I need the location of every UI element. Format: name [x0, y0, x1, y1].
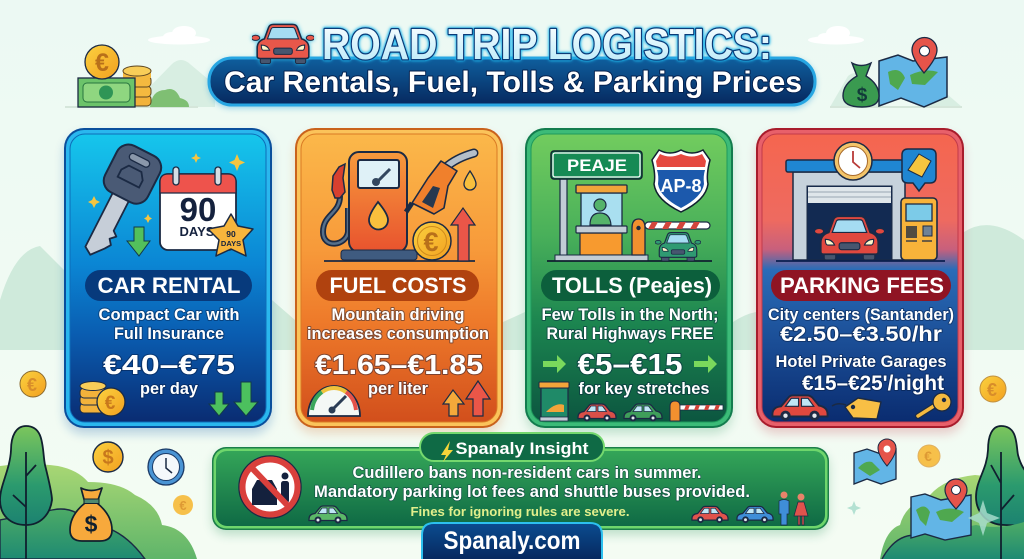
- description: increases consumption: [307, 325, 489, 343]
- icon: mini barrier: [670, 401, 723, 421]
- icon: price tag: [832, 398, 881, 419]
- icon: coin stack: €: [105, 393, 116, 414]
- icon: mini toll: [539, 382, 569, 421]
- icon: calendar: DAYS: [180, 224, 215, 239]
- sparkles: [88, 153, 245, 223]
- icon: star badge: [208, 214, 253, 256]
- title banner: [209, 58, 815, 105]
- insight text: [314, 463, 750, 519]
- icon: euro coin right: €: [987, 380, 997, 400]
- footer: website: Spanaly.com: [444, 527, 580, 555]
- description: [542, 306, 718, 343]
- icon: star badge: DAYS: [221, 239, 241, 248]
- decoration: money bag and map, top right: $: [857, 85, 868, 106]
- icon: money bag left: [70, 488, 112, 541]
- insight text: Fines for ignoring rules are severe.: [410, 504, 630, 519]
- icon: calendar: 90: [180, 191, 216, 228]
- sign: peaje: PEAJE: [567, 156, 627, 175]
- icon: fuel drop: [464, 171, 476, 190]
- description: Few Tolls in the North;: [542, 306, 718, 324]
- hotel garage rate: Hotel Private Garages: [776, 353, 946, 371]
- icon: down arrows: [209, 382, 258, 416]
- icon: large map: [911, 479, 971, 540]
- price: [315, 349, 483, 398]
- description: Compact Car with: [98, 306, 240, 324]
- heading pill: PARKING FEES: [780, 273, 944, 298]
- icon: AP-8 shield: [652, 150, 710, 212]
- icon: no cars sign: [239, 456, 301, 518]
- city center rate: City centers (Santander): [768, 306, 954, 324]
- icon: garage clock: [834, 142, 872, 180]
- icon: red side car: [772, 395, 828, 421]
- icon: fuel pump: [324, 152, 475, 261]
- icon: euro coin left: €: [27, 375, 37, 395]
- icon: star badge: 90: [226, 229, 236, 239]
- insight tab: [420, 433, 604, 462]
- icon: pay kiosk: [901, 198, 937, 260]
- panel: fuel costs: [295, 128, 503, 434]
- decoration: money bag and map, top right: [830, 38, 962, 107]
- icon: green car: [309, 506, 347, 524]
- icon: green arrows: [543, 355, 717, 373]
- icon: ticket bubble: [902, 149, 936, 191]
- icon: calendar: [160, 167, 236, 250]
- panel: parking fees: [756, 128, 964, 434]
- heading pill: CAR RENTAL: [98, 273, 240, 298]
- subtitle: Car Rentals, Fuel, Tolls & Parking Prices: [224, 66, 802, 99]
- scenery: bottom-right hills and tree: [880, 426, 1024, 559]
- icon: green down arrow: [127, 227, 150, 256]
- icon: euro coin: [413, 222, 451, 260]
- price: per day: [140, 379, 199, 398]
- heading pill: TOLLS (Peajes): [552, 273, 712, 298]
- icon: gauge: [308, 386, 360, 416]
- price: €1.65–€1.85: [315, 349, 483, 380]
- price: €40–€75: [103, 349, 235, 380]
- description: [307, 306, 489, 343]
- panel: tolls: [525, 128, 733, 434]
- insight text: Mandatory parking lot fees and shuttle buses provided.: [314, 482, 750, 501]
- icon: blue car: [737, 506, 773, 523]
- panel: spanaly insight: [212, 433, 829, 535]
- heading pill: [85, 270, 252, 301]
- icon: dollar coin: [93, 442, 123, 472]
- hotel garage rate: €15–€25'/night: [802, 372, 944, 395]
- icon: title car: [251, 24, 315, 64]
- sign: peaje: [551, 151, 642, 179]
- icon: red car: [578, 404, 616, 422]
- icon: faded coin right: €: [924, 448, 932, 464]
- icon: toll booth: [547, 151, 712, 261]
- description: Rural Highways FREE: [546, 325, 714, 343]
- icon: left nozzle and hose: [323, 164, 348, 244]
- panel: car rental: [64, 128, 272, 434]
- heading pill: FUEL COSTS: [330, 273, 466, 298]
- title: ROAD TRIP LOGISTICS:: [322, 20, 772, 69]
- heading pill: [316, 270, 479, 301]
- icon: green car: [655, 232, 701, 261]
- icon: red car: [814, 216, 885, 260]
- icon: money bag left: $: [85, 511, 98, 537]
- icon: faded coin right: [918, 445, 940, 467]
- icon: red up arrow: [451, 208, 475, 261]
- icon: clock: [148, 449, 184, 485]
- icon: AP-8 shield: AP-8: [660, 175, 702, 196]
- icon: right nozzle: [406, 153, 474, 214]
- icon: dollar coin: $: [102, 447, 114, 469]
- icon: garage: [776, 160, 945, 261]
- decoration: money and coins, top left: [65, 45, 198, 107]
- icon: up arrows: [443, 390, 464, 416]
- icon: euro coin left: [20, 371, 46, 397]
- price: per liter: [368, 379, 428, 398]
- icon: barrier: [632, 219, 710, 255]
- price: [103, 349, 235, 398]
- insight text: Cudillero bans non-resident cars in summer.: [352, 463, 702, 482]
- icon: euro coin: €: [423, 227, 439, 257]
- icon: red car: [692, 506, 728, 523]
- price: for key stretches: [578, 379, 710, 398]
- city center rate: €2.50–€3.50/hr: [780, 323, 942, 346]
- hotel garage rate: [776, 353, 946, 395]
- insight tab: Spanaly Insight: [456, 439, 589, 458]
- icon: green car: [624, 404, 662, 422]
- footer: website: [422, 523, 602, 559]
- icon: gold key: [918, 393, 951, 416]
- description: [98, 306, 240, 343]
- icon: coin stack: [80, 382, 125, 416]
- icon: small map: [854, 439, 896, 484]
- decoration: money and coins, top left: €: [95, 49, 109, 77]
- icon: people: [779, 492, 808, 525]
- price: €5–€15: [578, 349, 682, 381]
- icon: faded coin: [173, 495, 193, 515]
- price: [578, 349, 710, 398]
- city center rate: [768, 306, 954, 346]
- description: Mountain driving: [332, 306, 464, 324]
- description: Full Insurance: [114, 325, 224, 343]
- scenery: bottom-left hills and tree: [0, 426, 197, 559]
- sparkles: [847, 500, 1000, 536]
- icon: car key: [70, 140, 166, 266]
- icon: euro coin right: [980, 376, 1006, 402]
- icon: faded coin: €: [179, 498, 187, 513]
